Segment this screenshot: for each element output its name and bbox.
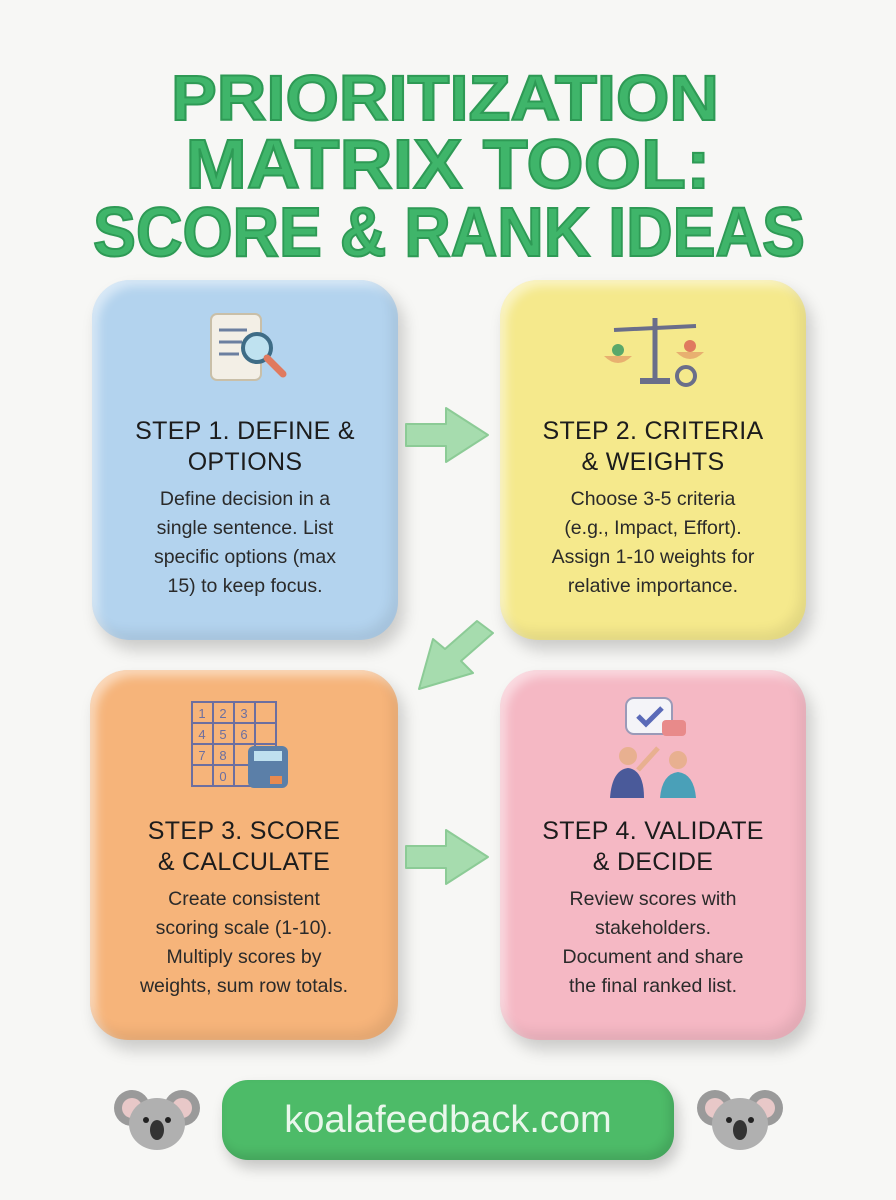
text: single sentence. List bbox=[157, 517, 333, 539]
icon: document with magnifier bbox=[210, 313, 286, 381]
icon: scales bbox=[604, 318, 704, 387]
text bbox=[552, 488, 754, 597]
panel: step 3 bbox=[90, 670, 398, 1040]
heading bbox=[135, 417, 355, 476]
heading bbox=[542, 817, 764, 876]
icon: number grid with calculator: 0 bbox=[219, 769, 227, 784]
icon: number grid with calculator: 4 bbox=[198, 727, 206, 742]
icon: koala left bbox=[114, 1090, 200, 1150]
icon: number grid with calculator: 7 bbox=[198, 748, 206, 763]
heading: & DECIDE bbox=[593, 848, 713, 876]
title bbox=[93, 62, 805, 271]
heading: STEP 3. SCORE bbox=[148, 817, 340, 845]
text: Assign 1-10 weights for bbox=[552, 546, 754, 568]
text: Create consistent bbox=[168, 888, 320, 910]
text bbox=[154, 488, 336, 597]
text: relative importance. bbox=[568, 575, 738, 597]
text: (e.g., Impact, Effort). bbox=[564, 517, 742, 539]
text bbox=[562, 888, 744, 997]
icon: people with checkmark bubble bbox=[610, 697, 696, 798]
text: the final ranked list. bbox=[569, 975, 737, 997]
arrow: step3 to step4 bbox=[405, 829, 489, 885]
text: stakeholders. bbox=[595, 917, 711, 939]
text: Choose 3-5 criteria bbox=[571, 488, 735, 510]
text: Define decision in a bbox=[160, 488, 330, 510]
text: Document and share bbox=[562, 946, 744, 968]
title: SCORE & RANK IDEAS bbox=[93, 193, 805, 271]
text bbox=[140, 888, 348, 997]
heading: OPTIONS bbox=[188, 448, 302, 476]
heading bbox=[148, 817, 340, 876]
text: weights, sum row totals. bbox=[140, 975, 348, 997]
panel: step 1 bbox=[92, 280, 398, 640]
heading: STEP 4. VALIDATE bbox=[542, 817, 764, 845]
arrow: step2 to step3 bbox=[418, 620, 494, 690]
heading bbox=[542, 417, 764, 476]
footer: url pill bbox=[222, 1080, 674, 1160]
panel: step 4 bbox=[500, 670, 806, 1040]
heading: STEP 2. CRITERIA bbox=[542, 417, 764, 445]
text: scoring scale (1-10). bbox=[156, 917, 332, 939]
title: MATRIX TOOL: bbox=[186, 125, 710, 203]
icon: number grid with calculator: 5 bbox=[219, 727, 227, 742]
text: specific options (max bbox=[154, 546, 336, 568]
title: PRIORITIZATION bbox=[171, 62, 719, 134]
text: Multiply scores by bbox=[167, 946, 321, 968]
text: Review scores with bbox=[570, 888, 736, 910]
arrow: step1 to step2 bbox=[405, 407, 489, 463]
heading: & WEIGHTS bbox=[582, 448, 724, 476]
icon: number grid with calculator bbox=[191, 701, 288, 788]
heading: STEP 1. DEFINE & bbox=[135, 417, 355, 445]
text: 15) to keep focus. bbox=[167, 575, 322, 597]
icon: number grid with calculator: 6 bbox=[240, 727, 248, 742]
icon: koala right bbox=[697, 1090, 783, 1150]
icon: number grid with calculator: 1 bbox=[198, 706, 206, 721]
icon: number grid with calculator: 2 bbox=[219, 706, 227, 721]
icon: number grid with calculator: 3 bbox=[240, 706, 248, 721]
footer: url pill: koalafeedback.com bbox=[284, 1099, 612, 1141]
icon: number grid with calculator: 8 bbox=[219, 748, 227, 763]
heading: & CALCULATE bbox=[158, 848, 330, 876]
panel: step 2 bbox=[500, 280, 806, 640]
